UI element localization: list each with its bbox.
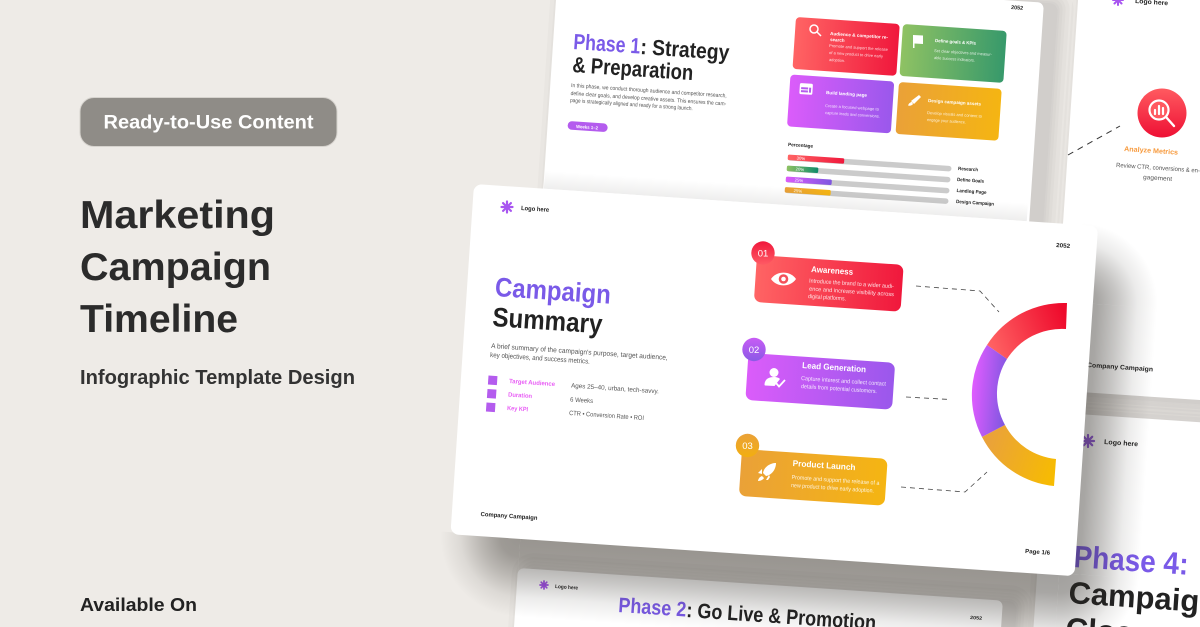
panel: campaign summary main slide: [450, 184, 1098, 576]
phase description: In this phase, we conduct thorough audience and competitor research,: [571, 83, 727, 99]
card: define goals: able success indicators.: [934, 55, 975, 63]
slide: Phase 1 strategy and preparation: [534, 0, 1044, 352]
icon: person with check: [764, 368, 785, 386]
card: design campaign assets: [896, 82, 1002, 141]
heading: Campaign Summary: Summary: [492, 302, 603, 339]
tag pill: Ready-to-Use Content: [80, 98, 337, 146]
heading: Phase 4: Phase 4:: [1073, 539, 1190, 582]
card: audience research: adoption.: [829, 57, 845, 63]
icon: analytics magnifier: [1138, 88, 1186, 138]
year label: 2052: [1056, 243, 1071, 250]
analyze description: [1116, 162, 1200, 183]
logo: [502, 202, 550, 214]
weeks pill: Weeks 1–2: [576, 124, 599, 131]
card: build landing page: Build landing page: [826, 90, 868, 98]
heading: Phase 1: & Preparation: [572, 52, 694, 85]
heading: Phase 4: [1065, 539, 1200, 627]
card: define goals: [900, 24, 1007, 83]
logo: Logo here: [521, 205, 550, 214]
main slide shadow: [435, 165, 1164, 627]
summary description: A brief summary of the campaign's purpose, target audience,: [491, 343, 668, 362]
dashed connector: product launch: [901, 472, 987, 492]
chart: percentage bars: 25%: [794, 178, 804, 183]
chart: percentage bars: Design Campaign: [956, 199, 994, 208]
summary details table: CTR • Conversion Rate • ROI: [569, 410, 644, 422]
summary details table: Ages 25–40, urban, tech-savvy.: [571, 383, 659, 395]
slide: analyze metrics: [1052, 0, 1200, 405]
chart: percentage bars: Landing Page: [956, 188, 987, 196]
phase description: page is strategically aligned and ready for a strong launch.: [570, 98, 693, 112]
card: lead generation: details from potential customers.: [801, 384, 877, 395]
chart: percentage bars: Percentage: [788, 142, 814, 150]
card: audience research: of a new product to drive early: [829, 50, 883, 59]
card: design campaign assets: engage your audience.: [927, 117, 966, 125]
available on label: Available On: [80, 595, 197, 615]
icon: brush: [908, 95, 921, 106]
card: design campaign assets: Develop visuals and content to: [927, 110, 983, 119]
chart: percentage bars: 30%: [796, 156, 806, 161]
year label: 2052: [1011, 5, 1023, 12]
card: build landing page: [787, 74, 894, 133]
badge 03: [736, 434, 759, 457]
icon: flag: [913, 35, 923, 48]
label: analyze metrics: Analyze Metrics: [1124, 146, 1178, 157]
dashed connector: lead generation: [906, 397, 950, 400]
chart: percentage bars: 20%: [795, 167, 805, 172]
badge 02: [742, 338, 766, 361]
dashed connector: [1068, 126, 1120, 155]
badge 02: 02: [749, 345, 759, 356]
badge 03: 03: [742, 441, 753, 452]
card: product launch: [736, 434, 888, 506]
footer: company campaign: Company Campaign: [1087, 362, 1153, 373]
card: design campaign assets: Design campaign assets: [928, 98, 982, 107]
card: audience research: Promote and support the release: [829, 43, 889, 52]
heading: Phase 1: [572, 29, 731, 85]
chart: percentage bars: Define Goals: [957, 177, 985, 185]
card: define goals: Define goals & KPIs: [935, 38, 977, 46]
card: build landing page: capture leads and conversions.: [825, 110, 880, 119]
card: product launch: Product Launch: [792, 458, 856, 472]
card: product launch: Promote and support the release of a: [791, 475, 880, 487]
logo: [540, 581, 578, 592]
phase description: [570, 83, 727, 112]
heading: Phase 2: Phase 2: [618, 594, 687, 622]
heading: Phase 1: Phase 1: [573, 29, 641, 58]
chart: donut ring: [972, 303, 1067, 486]
card: awareness: digital platforms.: [808, 294, 847, 303]
card: awareness: Awareness: [811, 264, 854, 277]
chart: percentage bars: [785, 142, 994, 208]
card: audience research: [793, 17, 900, 76]
heading: Phase 1: : Strategy: [640, 34, 731, 65]
summary description: key objectives, and success metrics.: [490, 352, 590, 366]
subtitle: Infographic Template Design: [80, 367, 355, 389]
summary details table: Duration: [508, 392, 532, 400]
dashed connector: awareness: [916, 286, 999, 312]
chart: percentage bars: Research: [958, 166, 978, 173]
card: build landing page: Create a focused webpage to: [825, 103, 880, 112]
icon: eye: [771, 273, 796, 285]
card: product launch: new product to drive early adoption.: [791, 483, 874, 495]
title: Timeline: [80, 298, 238, 341]
badge 01: [751, 241, 775, 265]
year label: 2052: [970, 615, 983, 622]
card: audience research: Audience & competitor re-: [830, 31, 889, 40]
analyze description: gagement: [1143, 174, 1173, 183]
card: lead generation: Capture interest and collect contact: [801, 376, 886, 388]
summary details table: Target Audience: [509, 378, 556, 388]
icon: browser window: [799, 83, 813, 95]
summary details table: [486, 376, 659, 422]
icon: magnifier: [810, 25, 821, 36]
logo: Logo here: [555, 584, 578, 592]
title: Campaign: [80, 246, 271, 289]
slide: Phase 4 campaign close: [1028, 412, 1200, 627]
title: Marketing: [80, 194, 275, 237]
card: awareness: [751, 241, 904, 312]
card: awareness: ence and increase visibility across: [809, 287, 894, 298]
weeks pill: [567, 121, 608, 132]
logo: Logo here: [1104, 439, 1138, 448]
footer: page number: Page 1/6: [1025, 549, 1051, 557]
logo: [1082, 435, 1138, 448]
footer: company campaign: Company Campaign: [480, 512, 538, 522]
title: [80, 194, 275, 341]
heading: Campaign Summary: [492, 272, 612, 339]
heading: Campaign Summary: Campaign: [494, 272, 612, 310]
chart: percentage bars: 25%: [793, 188, 803, 194]
card: define goals: Set clear objectives and measur-: [934, 48, 993, 57]
logo: [1113, 0, 1169, 7]
tag pill: Ready-to-Use Content: Ready-to-Use Content: [104, 112, 314, 134]
card: lead generation: [742, 338, 895, 410]
summary details table: Key KPI: [507, 405, 529, 413]
card: awareness: Introduce the brand to a wider audi-: [809, 279, 894, 290]
phase description: define clear goals, and develop creative assets. This ensures the cam-: [570, 91, 727, 107]
icon: rocket: [758, 463, 776, 481]
back slides soft shadows: [503, 0, 1200, 627]
card: audience research: search: [830, 37, 845, 43]
summary details table: 6 Weeks: [570, 397, 594, 405]
card: lead generation: Lead Generation: [802, 360, 866, 374]
heading: Phase 2: [618, 594, 877, 627]
slide: Phase 2 go live and promotion: [510, 568, 1003, 627]
badge 01: 01: [758, 248, 768, 260]
